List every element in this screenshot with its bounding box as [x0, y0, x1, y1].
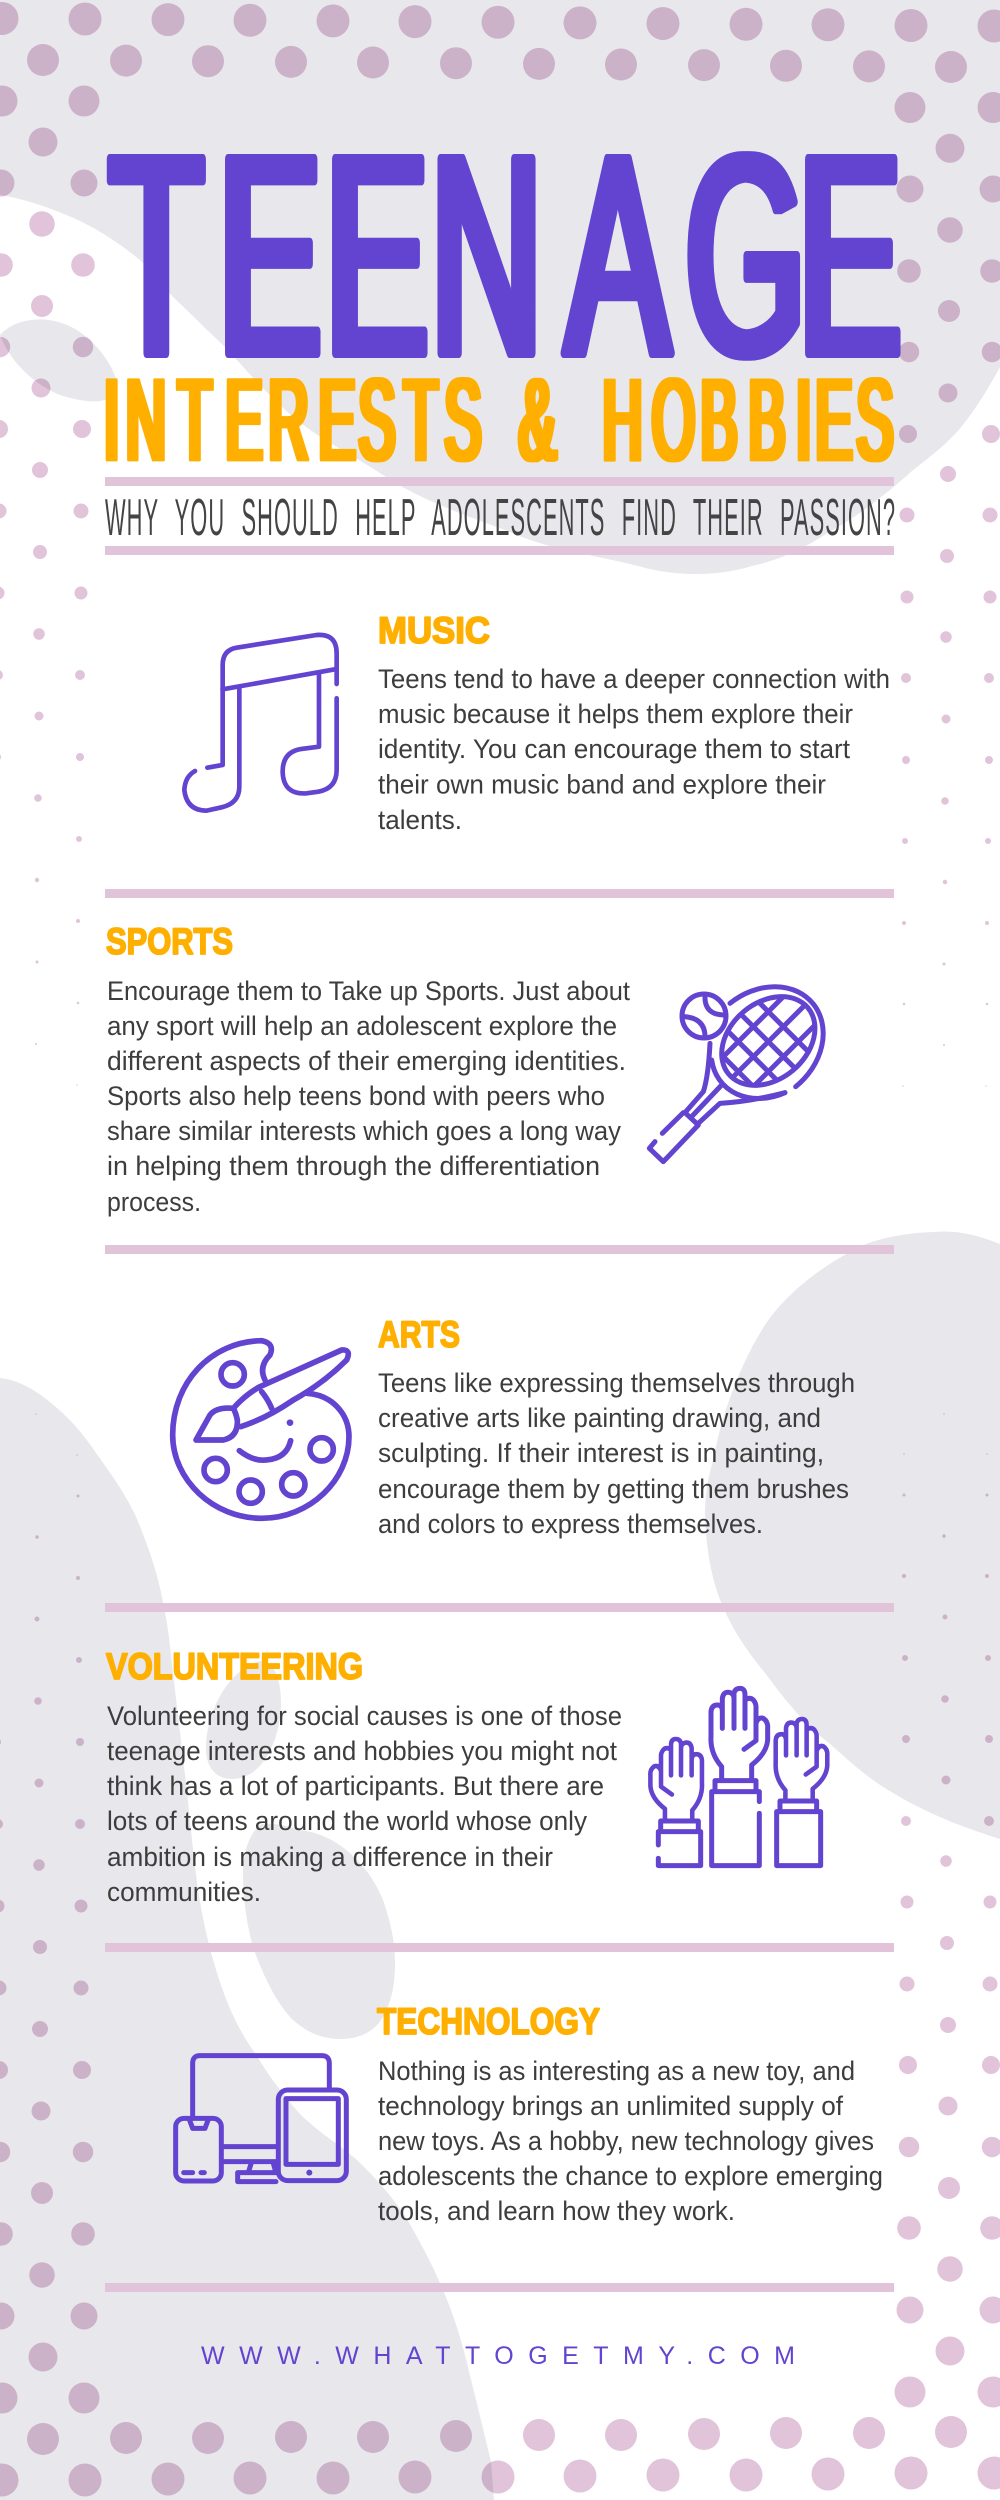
text: arts body: sculpting. If their interest is in painting,: [378, 1438, 824, 1468]
divider: [105, 1603, 894, 1612]
text: sports body: in helping them through the differentiation: [107, 1151, 600, 1181]
text: volunteering body: [107, 1701, 622, 1907]
text: arts body: encourage them by getting them brushes: [378, 1474, 849, 1504]
text: volunteering body: think has a lot of participants. But there are: [107, 1771, 604, 1801]
heading: volunteering: VOLUNTEERING: [106, 1646, 363, 1687]
text: technology body: adolescents the chance to explore emerging: [378, 2161, 883, 2191]
text: sports body: process.: [107, 1187, 201, 1217]
text: sports body: share similar interests which goes a long way: [107, 1116, 621, 1146]
panel: technology: [176, 2001, 883, 2226]
text: arts body: Teens like expressing themselves through: [378, 1368, 855, 1398]
heading: sports: SPORTS: [106, 921, 233, 962]
divider: [105, 477, 894, 486]
subtitle: WHY YOU SHOULD HELP ADOLESCENTS FIND THEIR PASSION?: [105, 489, 895, 547]
panel: arts: [173, 1314, 855, 1539]
title: interests and hobbies: INTERESTS & HOBBIES: [104, 356, 893, 485]
text: technology body: new toys. As a hobby, new technology gives: [378, 2126, 874, 2156]
text: technology body: Nothing is as interesting as a new toy, and: [378, 2056, 855, 2086]
panel: music: [184, 610, 890, 835]
text: arts body: creative arts like painting drawing, and: [378, 1403, 821, 1433]
footer url: WWW.WHATTOGETMY.COM: [201, 2342, 795, 2370]
heading: arts: ARTS: [378, 1314, 460, 1355]
icon: raised hands: [650, 1688, 827, 1866]
panel: volunteering: [106, 1646, 827, 1907]
text: volunteering body: lots of teens around the world whose only: [107, 1806, 587, 1836]
text: sports body: any sport will help an adolescent explore the: [107, 1011, 617, 1041]
icon: tennis racket and ball: [646, 984, 826, 1164]
divider: [105, 546, 894, 555]
icon: paint palette and brush: [173, 1341, 349, 1518]
text: technology body: [378, 2056, 883, 2226]
text: volunteering body: teenage interests and hobbies you might not: [107, 1736, 617, 1766]
icon: monitor tablet and phone: [176, 2056, 346, 2182]
divider: [105, 1245, 894, 1254]
text: technology body: technology brings an unlimited supply of: [378, 2091, 843, 2121]
title: TEENAGE: TEENAGE: [109, 99, 902, 414]
text: music body: music because it helps them explore their: [378, 699, 853, 729]
divider: [105, 889, 894, 898]
text: arts body: [378, 1368, 855, 1539]
text: sports body: Encourage them to Take up Sports. Just about: [107, 976, 630, 1006]
text: volunteering body: communities.: [107, 1877, 261, 1907]
text: volunteering body: ambition is making a difference in their: [107, 1842, 553, 1872]
divider: [105, 1943, 894, 1952]
text: music body: Teens tend to have a deeper connection with: [378, 664, 890, 694]
text: arts body: and colors to express themselves.: [378, 1509, 763, 1539]
icon: music notes: [184, 635, 337, 811]
heading: music: MUSIC: [378, 610, 490, 651]
heading: technology: TECHNOLOGY: [377, 2001, 600, 2042]
panel: sports: [106, 927, 826, 1216]
divider: [105, 2283, 894, 2292]
text: sports body: different aspects of their emerging identities.: [107, 1046, 626, 1076]
text: sports body: [107, 976, 630, 1217]
text: music body: their own music band and explore their: [378, 770, 826, 800]
text: sports body: Sports also help teens bond with peers who: [107, 1081, 605, 1111]
text: music body: identity. You can encourage them to start: [378, 734, 850, 764]
text: music body: talents.: [378, 805, 462, 835]
text: technology body: tools, and learn how they work.: [378, 2196, 735, 2226]
text: music body: [378, 664, 890, 835]
text: volunteering body: Volunteering for social causes is one of those: [107, 1701, 622, 1731]
